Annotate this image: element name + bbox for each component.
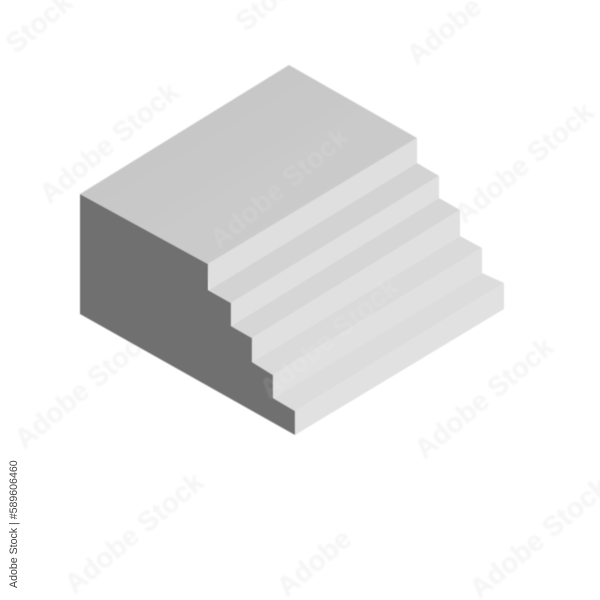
watermarks over the stairs: Adobe Stock (33, 76, 185, 210)
riser 3 (252, 210, 460, 362)
side face (80, 194, 295, 435)
riser 1 (208, 138, 417, 290)
watermarks on white background: Adobe Stock (58, 466, 210, 600)
tread 3 (231, 198, 460, 338)
watermarks over the stairs (33, 76, 405, 405)
watermarks on white background: Adobe Stock (8, 321, 160, 455)
watermarks on white background: Adobe Stock (448, 96, 600, 230)
riser 5 (295, 283, 504, 435)
stock id credit: Adobe Stock | #589606460 (8, 460, 20, 588)
watermarks over the stairs: Adobe Stock (253, 271, 405, 405)
watermarks on white background: Adobe Stock (33, 76, 185, 210)
tread 4 (252, 236, 482, 375)
top landing (80, 65, 417, 264)
watermarks over the stairs: Adobe Stock (203, 121, 355, 255)
riser 2 (231, 176, 439, 326)
tread 5 (273, 273, 504, 411)
tread 2 (209, 163, 439, 303)
watermarks on white background: Adobe Stock (408, 331, 560, 465)
stairs block (80, 65, 504, 435)
riser 4 (273, 248, 482, 398)
